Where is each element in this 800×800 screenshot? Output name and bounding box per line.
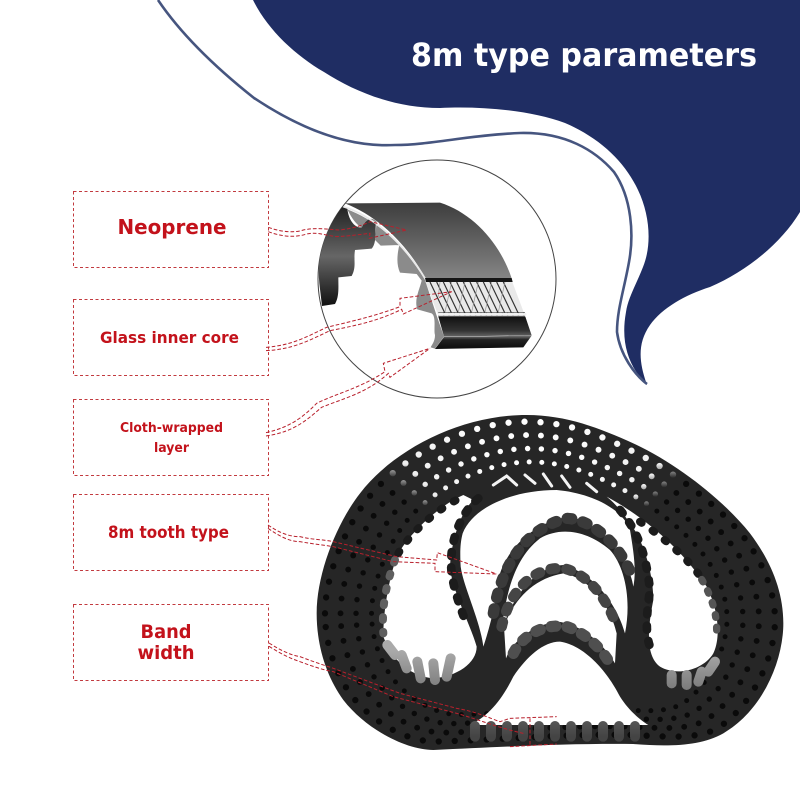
title: 8m type parameters [411, 36, 757, 74]
hole crescent inside second belt [460, 490, 635, 647]
teeth: left hole side [383, 560, 395, 633]
teeth: hole upper edges [398, 497, 705, 583]
dark tooth faces [319, 207, 376, 306]
black strip above core [425, 278, 513, 282]
arrow: Cloth-wrapped layer [266, 348, 430, 436]
hole inside third belt [502, 532, 628, 633]
curved navy line [158, 0, 647, 384]
hole inside fourth belt [504, 573, 617, 663]
callout box: Cloth-wrapped layer: Cloth-wrapped [120, 421, 223, 436]
callout box: 8m tooth type: 8m tooth type [108, 523, 229, 543]
white gaps under inner row [493, 474, 597, 492]
teeth: third belt [493, 518, 633, 613]
teeth: right hole side [700, 577, 717, 630]
callout box: Cloth-wrapped layer: layer [154, 441, 190, 456]
circle outline [318, 160, 556, 398]
hole bottom notch [470, 642, 648, 725]
big belt photo [317, 415, 783, 750]
hole right [607, 497, 718, 671]
arrow: 8m tooth type [268, 525, 497, 574]
belt outer silhouette [317, 415, 783, 750]
arrow: Band width [269, 643, 557, 747]
callout box: Neoprene [74, 192, 268, 268]
belt top surface [345, 203, 512, 278]
navy header shape [253, 0, 800, 385]
teeth: second belt outer left and right [451, 498, 478, 620]
callout box: Neoprene: Neoprene [118, 215, 226, 239]
hole left [383, 495, 477, 678]
magnified belt cross-section [318, 160, 556, 398]
grey tooth side faces [347, 209, 444, 349]
callout box: Cloth-wrapped layer [74, 400, 268, 476]
white edge stripe [343, 207, 426, 279]
callout box: 8m tooth type [74, 494, 268, 570]
glass fibre core [426, 282, 525, 316]
lower band [438, 317, 532, 337]
teeth: fifth belt [513, 626, 612, 667]
callout box: Band width: width [138, 642, 194, 664]
teeth: left hole bottom [387, 645, 451, 680]
callout box: Glass inner core [74, 300, 268, 376]
teeth: right hole bottom [672, 662, 715, 685]
callout box: Glass inner core: Glass inner core [100, 328, 239, 347]
arrow: Neoprene [268, 222, 407, 238]
callout box: Band width: Band [140, 621, 192, 643]
teeth: bottom belt [475, 726, 635, 737]
dark tooth rows [325, 422, 775, 742]
callout box: Band width [74, 604, 268, 680]
arrow: Glass inner core [266, 292, 452, 351]
teeth: fourth belt [502, 568, 617, 627]
